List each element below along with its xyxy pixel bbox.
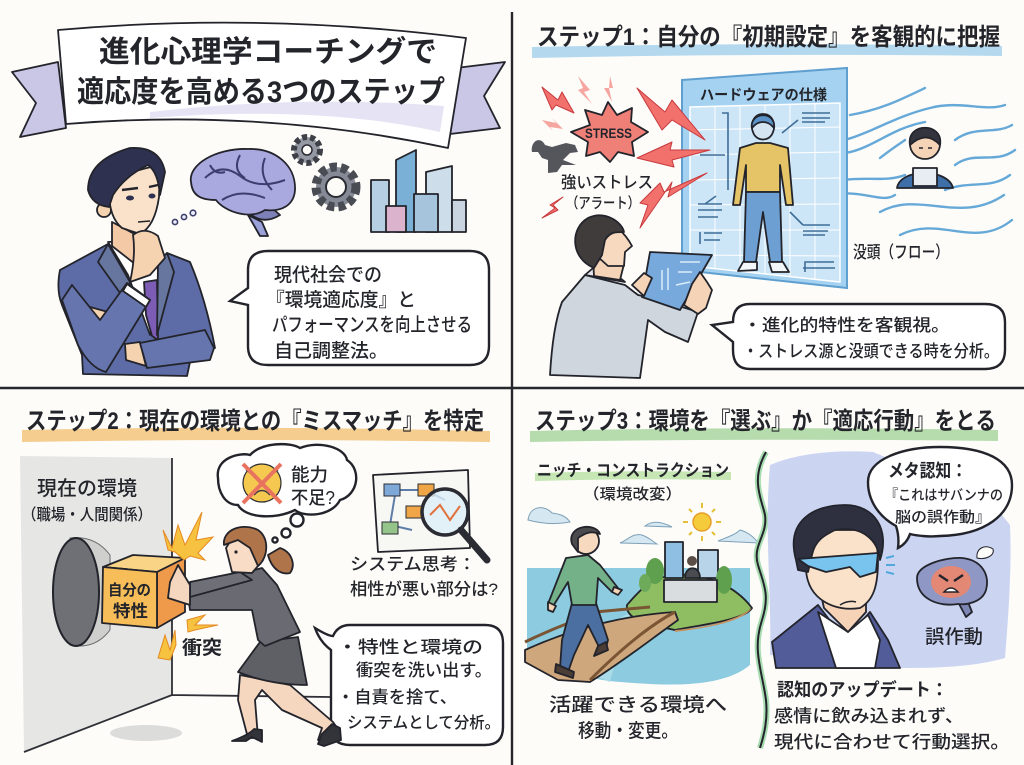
wind lines: flow: [813, 88, 1015, 235]
gray wall with hole: [20, 456, 330, 752]
text: systems thinking: 相性が悪い部分は?: [350, 579, 498, 599]
callout: metacognition bubble: 脳の誤作動』: [895, 509, 991, 526]
callout: intro speech bubble: 現代社会での: [274, 264, 382, 286]
icon: system diagram with magnifier: [373, 470, 487, 560]
icon: stress burst: STRESS: [585, 125, 632, 141]
purple watercolor background: [768, 451, 1011, 668]
label: strong stress: （アラート）: [566, 195, 640, 212]
icon: city: [371, 150, 466, 232]
panel: step 3: [525, 408, 1012, 752]
label: current environment: [22, 477, 152, 524]
text: cognitive update: 感情に飲み込まれず、: [774, 706, 964, 726]
callout: step 2 bubble: ・特性と環境の: [337, 638, 483, 657]
callout: step 2 bubble: 衝突を洗い出す。: [356, 661, 492, 680]
text: move to environment: 活躍できる環境へ: [549, 694, 727, 716]
text: move to environment: 移動・変更。: [578, 720, 678, 742]
callout: metacognition bubble: 『これはサバンナの: [885, 487, 1003, 503]
heading: step 2: ステップ2：現在の環境との『ミスマッチ』を特定: [26, 408, 484, 435]
illustration: man walking: [548, 527, 622, 678]
heading highlight: [22, 428, 490, 442]
title: 進化心理学コーチングで: [99, 36, 437, 69]
hardware specification board: [682, 68, 847, 288]
person on board: [733, 114, 793, 272]
icon: gears: [294, 137, 356, 207]
icon: focused worker with laptop: [897, 128, 953, 188]
icon: stress burst: [571, 102, 648, 162]
callout: metacognition bubble: メタ認知：: [888, 461, 967, 481]
title: [77, 36, 445, 109]
text: cognitive update: 認知のアップデート：: [777, 679, 948, 700]
callout: metacognition bubble: [868, 447, 1012, 548]
callout: step 2 bubble: システムとして分析。: [347, 714, 500, 732]
callout: intro speech bubble: 『環境適応度』と: [266, 289, 416, 311]
icon: lightning bolts: [542, 76, 710, 228]
text: systems thinking: [350, 555, 498, 599]
icon: collision sparks: [158, 512, 218, 660]
hardware specification board: ハードウェアの仕様: [700, 87, 827, 104]
illustration: man with smart glasses: [772, 505, 900, 668]
callout: step 2 bubble: ・自責を捨て、: [337, 688, 457, 707]
thought bubble: lack of ability: [218, 444, 356, 543]
label: current environment: 現在の環境: [37, 477, 137, 500]
callout: step 1 bubble: ・進化的特性を客観視。: [743, 316, 950, 335]
illustration: woman pushing box: [168, 527, 341, 746]
panel: step 2: [20, 408, 503, 752]
callout: step 2 bubble: [315, 625, 503, 745]
label: malfunction: 誤作動: [925, 626, 983, 648]
label: collision: 衝突: [182, 637, 222, 659]
text: move to environment: [549, 694, 727, 742]
icon: panther: [532, 140, 578, 173]
title: 適応度を高める3つのステップ: [77, 76, 445, 109]
panel: title and introduction: [12, 23, 505, 376]
illustration: thinking businessman: [58, 148, 215, 376]
label: current environment: （職場・人間関係）: [22, 506, 152, 524]
callout: intro speech bubble: [230, 251, 489, 365]
illustration: island scene: [525, 503, 758, 685]
illustration: man with tablet: [550, 215, 712, 378]
thought bubble: lack of ability: 能力: [291, 465, 328, 485]
wavy divider: [757, 452, 767, 748]
spec notes: [698, 113, 835, 272]
thought bubble: lack of ability: 不足?: [291, 488, 335, 508]
icon: box of own traits: [102, 555, 185, 628]
label: strong stress: 強いストレス: [561, 173, 653, 192]
label: strong stress: [561, 173, 653, 212]
callout: intro speech bubble: 自己調整法。: [274, 340, 388, 362]
panel: step 1: [532, 24, 1015, 378]
callout: step 1 bubble: ・ストレス源と没頭できる時を分析。: [743, 342, 999, 361]
label: flow: 没頭（フロー）: [853, 243, 949, 262]
icon: brain: [191, 149, 295, 236]
heading highlight: [532, 44, 1002, 58]
subheading: niche construction: ニッチ・コンストラクション: [537, 461, 729, 480]
icon: box of own traits: 特性: [113, 602, 148, 621]
text: cognitive update: 現代に合わせて行動選択。: [774, 732, 1010, 752]
text: systems thinking: システム思考：: [350, 555, 476, 574]
title ribbon: [12, 23, 505, 148]
icon: box of own traits: 自分の: [108, 581, 151, 599]
subheading: niche construction: （環境改変）: [583, 486, 682, 503]
text: cognitive update: [774, 679, 1010, 752]
subheading: niche construction: [535, 461, 731, 503]
heading highlight: [530, 428, 998, 442]
callout: step 1 bubble: [712, 304, 1005, 369]
callout: intro speech bubble: パフォーマンスを向上させる: [272, 314, 472, 336]
icon: angry brain: [917, 547, 993, 617]
